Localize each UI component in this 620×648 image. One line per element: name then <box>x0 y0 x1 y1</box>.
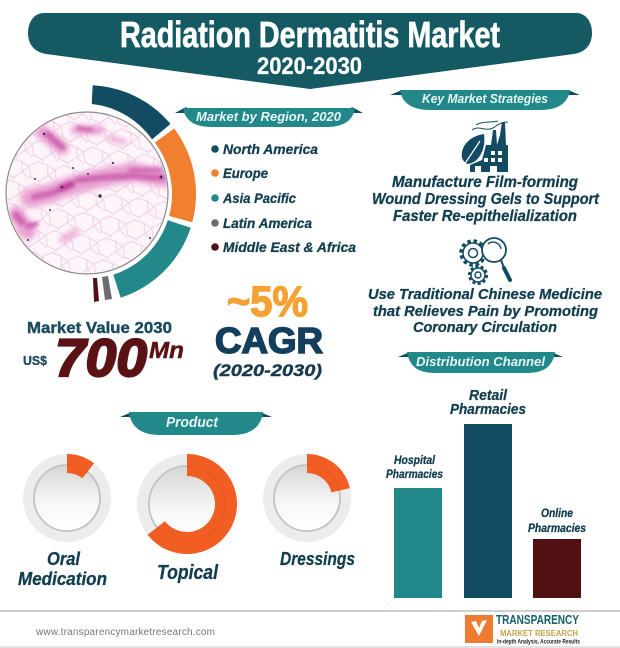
heading ribbon: distribution channel: Distribution Channel <box>416 354 545 369</box>
strategy text 2 <box>368 286 602 336</box>
website url: www.transparencymarketresearch.com <box>35 627 215 638</box>
donut: dressings <box>263 454 355 569</box>
label: Topical <box>157 562 218 584</box>
market value callout <box>23 320 184 388</box>
bar: hospital pharmacies: Hospital <box>394 455 436 467</box>
icon: leaf and factory <box>462 121 508 172</box>
bar: online pharmacies: Pharmacies <box>528 523 586 535</box>
bar: retail pharmacies: Pharmacies <box>450 401 526 418</box>
market value callout: US$ <box>23 353 48 368</box>
strategy text 1: Faster Re-epithelialization <box>393 208 577 225</box>
label: Dressings <box>280 549 355 569</box>
logo <box>465 613 580 646</box>
title text: Radiation Dermatitis Market <box>120 14 500 55</box>
heading ribbon: market by region: Market by Region, 2020 <box>196 110 341 124</box>
legend: regions: Europe <box>223 165 268 181</box>
CAGR callout: (2020-2030) <box>213 361 322 380</box>
strategy text 2: Use Traditional Chinese Medicine <box>368 286 602 303</box>
logo: TRANSPARENCY <box>496 613 580 627</box>
title banner <box>28 13 592 89</box>
bar: retail pharmacies <box>450 387 526 598</box>
ring segment: Europe <box>155 128 196 222</box>
ring segment: Asia Pacific <box>113 220 191 298</box>
ring segment: Middle East and Africa <box>93 278 99 302</box>
strategy text 1: Wound Dressing Gels to Support <box>372 191 600 208</box>
heading ribbon: key market strategies: Key Market Strategies <box>422 92 548 106</box>
bar: online pharmacies <box>528 508 586 598</box>
bar: hospital pharmacies: Pharmacies <box>386 469 443 481</box>
strategy text 1 <box>372 174 600 225</box>
CAGR callout <box>213 278 323 380</box>
market value callout: 700 <box>55 329 147 388</box>
legend: regions: Latin America <box>223 215 312 231</box>
legend: regions <box>211 141 356 255</box>
subtitle text: 2020-2030 <box>257 53 362 80</box>
heading ribbon: market by region <box>175 107 363 127</box>
heading ribbon: distribution channel <box>398 352 563 373</box>
bar: online pharmacies: Online <box>541 508 574 520</box>
logo: MARKET RESEARCH <box>500 629 578 638</box>
market value callout: Mn <box>149 337 184 363</box>
donut: topical <box>137 454 237 584</box>
market by region ring chart <box>92 85 196 302</box>
legend: regions: Asia Pacific <box>222 190 296 206</box>
legend: regions: North America <box>223 141 318 157</box>
ring segment: Latin America <box>102 276 112 300</box>
heading ribbon: product: Product <box>166 414 219 431</box>
strategy text 2: that Relieves Pain by Promoting <box>373 303 598 320</box>
CAGR callout: ~5% <box>227 278 308 326</box>
tissue micrograph circle <box>5 111 169 275</box>
strategy text 1: Manufacture Film-forming <box>392 174 579 191</box>
bar: hospital pharmacies <box>386 455 443 598</box>
strategy text 2: Coronary Circulation <box>413 319 557 336</box>
market value callout: Market Value 2030 <box>27 320 172 337</box>
donut: oral medication <box>18 454 111 589</box>
donut: oral medication: Medication <box>18 569 107 589</box>
CAGR callout: CAGR <box>215 320 323 361</box>
legend: regions: Middle East & Africa <box>223 239 356 255</box>
ring segment: North America <box>92 85 170 139</box>
heading ribbon: key market strategies <box>390 90 580 110</box>
footer <box>0 610 620 648</box>
bar: retail pharmacies: Retail <box>469 387 508 404</box>
label: Oral <box>47 549 81 569</box>
bar chart: distribution channel <box>386 387 586 598</box>
icon: gears and magnifier <box>461 238 510 284</box>
heading ribbon: product <box>120 412 272 435</box>
logo: In-depth Analysis, Accurate Results <box>497 638 580 646</box>
